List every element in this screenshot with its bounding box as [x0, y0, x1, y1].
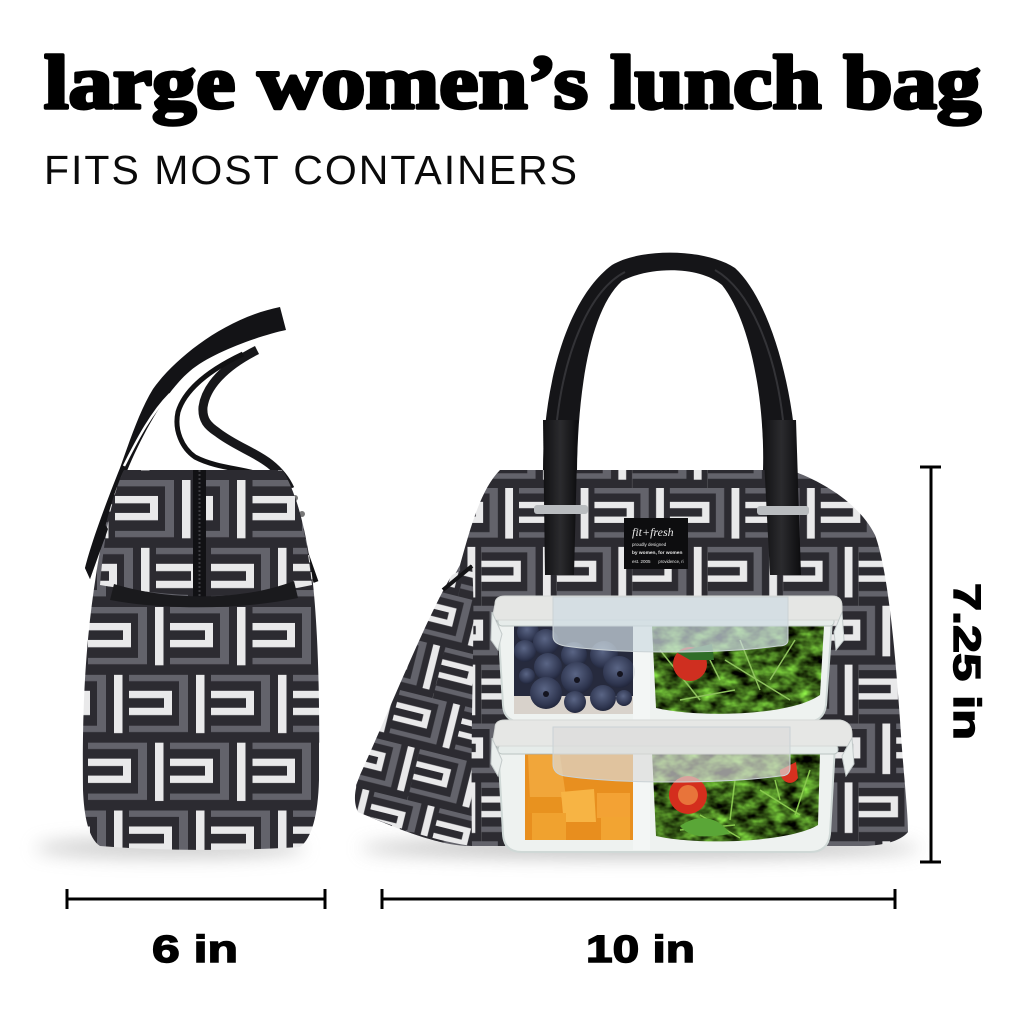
front bag body — [356, 470, 908, 846]
divider — [633, 750, 650, 850]
front handles — [543, 253, 801, 575]
side view top panel right — [205, 470, 312, 596]
lid tab — [553, 597, 788, 652]
divider — [633, 625, 650, 721]
lid — [492, 720, 852, 746]
side view pocket edge — [110, 581, 298, 607]
width dimension 6 in — [67, 889, 325, 971]
salad — [652, 752, 820, 841]
side view strap ends over bag — [85, 521, 108, 579]
brand label: est. 2005 — [632, 559, 651, 564]
side view handles — [85, 307, 316, 582]
blueberries — [514, 621, 635, 714]
lid tab — [553, 727, 790, 782]
side view top panel left — [100, 470, 196, 595]
side drawstring pocket — [355, 565, 473, 846]
side view lunch bag — [35, 307, 319, 858]
subtitle: FITS MOST CONTAINERS — [44, 147, 577, 193]
width dimension 10 in — [382, 889, 895, 971]
side view zipper — [193, 470, 206, 597]
side clips — [491, 738, 854, 776]
silver buckle left — [534, 505, 588, 514]
brand label: by women, for women — [632, 550, 682, 556]
side view bag body — [83, 470, 319, 850]
top glass container — [491, 596, 844, 722]
height dimension 7.25 in — [920, 467, 987, 862]
brand label: providence, ri — [658, 559, 684, 564]
lid — [492, 596, 842, 620]
salad — [652, 626, 824, 714]
side clips — [491, 612, 844, 650]
cheese cubes — [525, 752, 633, 840]
title: large women’s lunch bag — [44, 41, 981, 125]
brand label — [624, 518, 688, 569]
bottom glass container — [491, 720, 854, 852]
front view lunch bag — [355, 253, 920, 858]
glass body — [498, 745, 835, 852]
silver buckle right — [757, 506, 809, 515]
glass body — [498, 620, 832, 722]
brand label: proudly designed — [632, 542, 667, 547]
brand label: fit+fresh — [632, 525, 674, 539]
width dimension 6 in: 6 in — [152, 929, 238, 971]
rim — [498, 745, 838, 754]
width dimension 10 in: 10 in — [586, 929, 695, 971]
rim — [498, 617, 834, 626]
height dimension 7.25 in: 7.25 in — [945, 583, 987, 740]
